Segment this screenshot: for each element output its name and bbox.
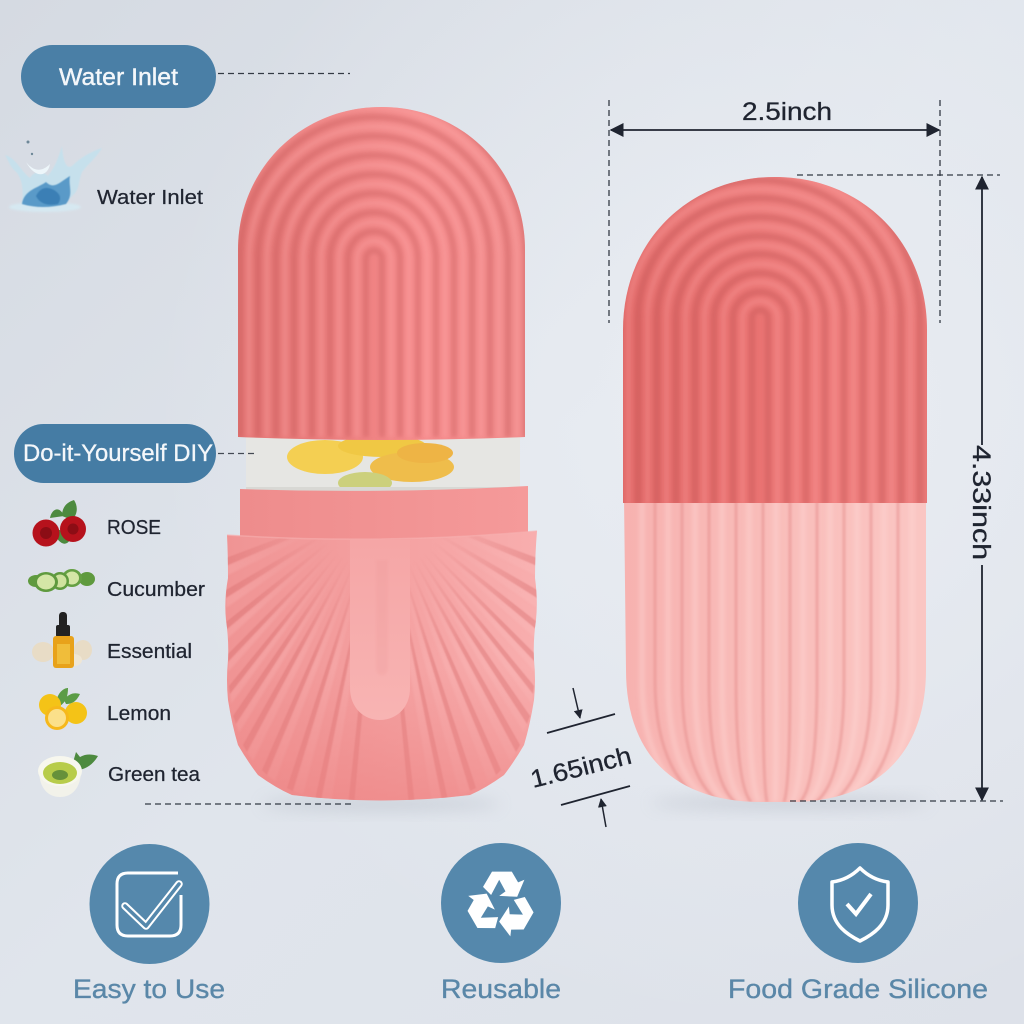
dimension: width 2.5inch: 2.5inch bbox=[742, 98, 832, 126]
upper cap bbox=[222, 98, 526, 440]
icon: cucumber bbox=[28, 569, 95, 592]
icon: essential oil bottle bbox=[32, 612, 92, 668]
label: Reusable bbox=[441, 974, 561, 1004]
ingredient: cucumber bbox=[28, 569, 205, 601]
product: closed capsule bbox=[600, 161, 927, 802]
inner collar bbox=[240, 486, 528, 540]
icon: recycle bbox=[441, 843, 561, 963]
ingredient: green tea bbox=[38, 752, 201, 797]
icon: shield bbox=[798, 843, 918, 963]
feature: easy to use bbox=[73, 844, 225, 1004]
label pill: do-it-yourself DIY: Do-it-Yourself DIY bbox=[23, 440, 213, 467]
feature: food grade silicone bbox=[728, 843, 988, 1004]
dimension: height 4.33inch: 4.33inch bbox=[967, 445, 995, 560]
floor shadows bbox=[261, 797, 930, 810]
label pill: water inlet: Water Inlet bbox=[59, 64, 178, 91]
label: Green tea bbox=[108, 764, 201, 786]
ingredient: rose bbox=[32, 500, 161, 546]
label: ROSE bbox=[107, 517, 161, 539]
icon: checkbox bbox=[90, 844, 210, 964]
label pill: do-it-yourself DIY bbox=[14, 424, 216, 483]
product: open capsule bbox=[222, 98, 537, 806]
label: Lemon bbox=[107, 703, 171, 725]
icon: green tea cup bbox=[38, 752, 98, 797]
leader line: water inlet bbox=[218, 72, 350, 74]
label: Easy to Use bbox=[73, 974, 225, 1004]
icon: lemon bbox=[39, 688, 87, 730]
lower shell with fan ribs bbox=[225, 530, 537, 800]
dimension: depth 1.65inch bbox=[528, 688, 634, 827]
leader line: base bbox=[145, 803, 353, 805]
label pill: water inlet bbox=[21, 45, 216, 108]
feature: reusable bbox=[441, 843, 561, 1004]
upper half bbox=[623, 177, 927, 503]
ingredient: lemon bbox=[39, 688, 171, 730]
icon: rose bbox=[32, 500, 86, 546]
icon: water splash bbox=[5, 140, 102, 212]
dimension: depth 1.65inch: 1.65inch bbox=[528, 742, 634, 794]
leader line: DIY bbox=[218, 452, 258, 454]
finger slot bbox=[350, 540, 410, 720]
ingredient: essential oil bbox=[32, 612, 192, 668]
lower half bbox=[624, 497, 926, 802]
label: Food Grade Silicone bbox=[728, 974, 988, 1004]
label: water inlet caption: Water Inlet bbox=[97, 187, 203, 209]
window with ice and fruit bbox=[246, 435, 520, 494]
label: Cucumber bbox=[107, 579, 205, 601]
label: Essential bbox=[107, 641, 192, 663]
